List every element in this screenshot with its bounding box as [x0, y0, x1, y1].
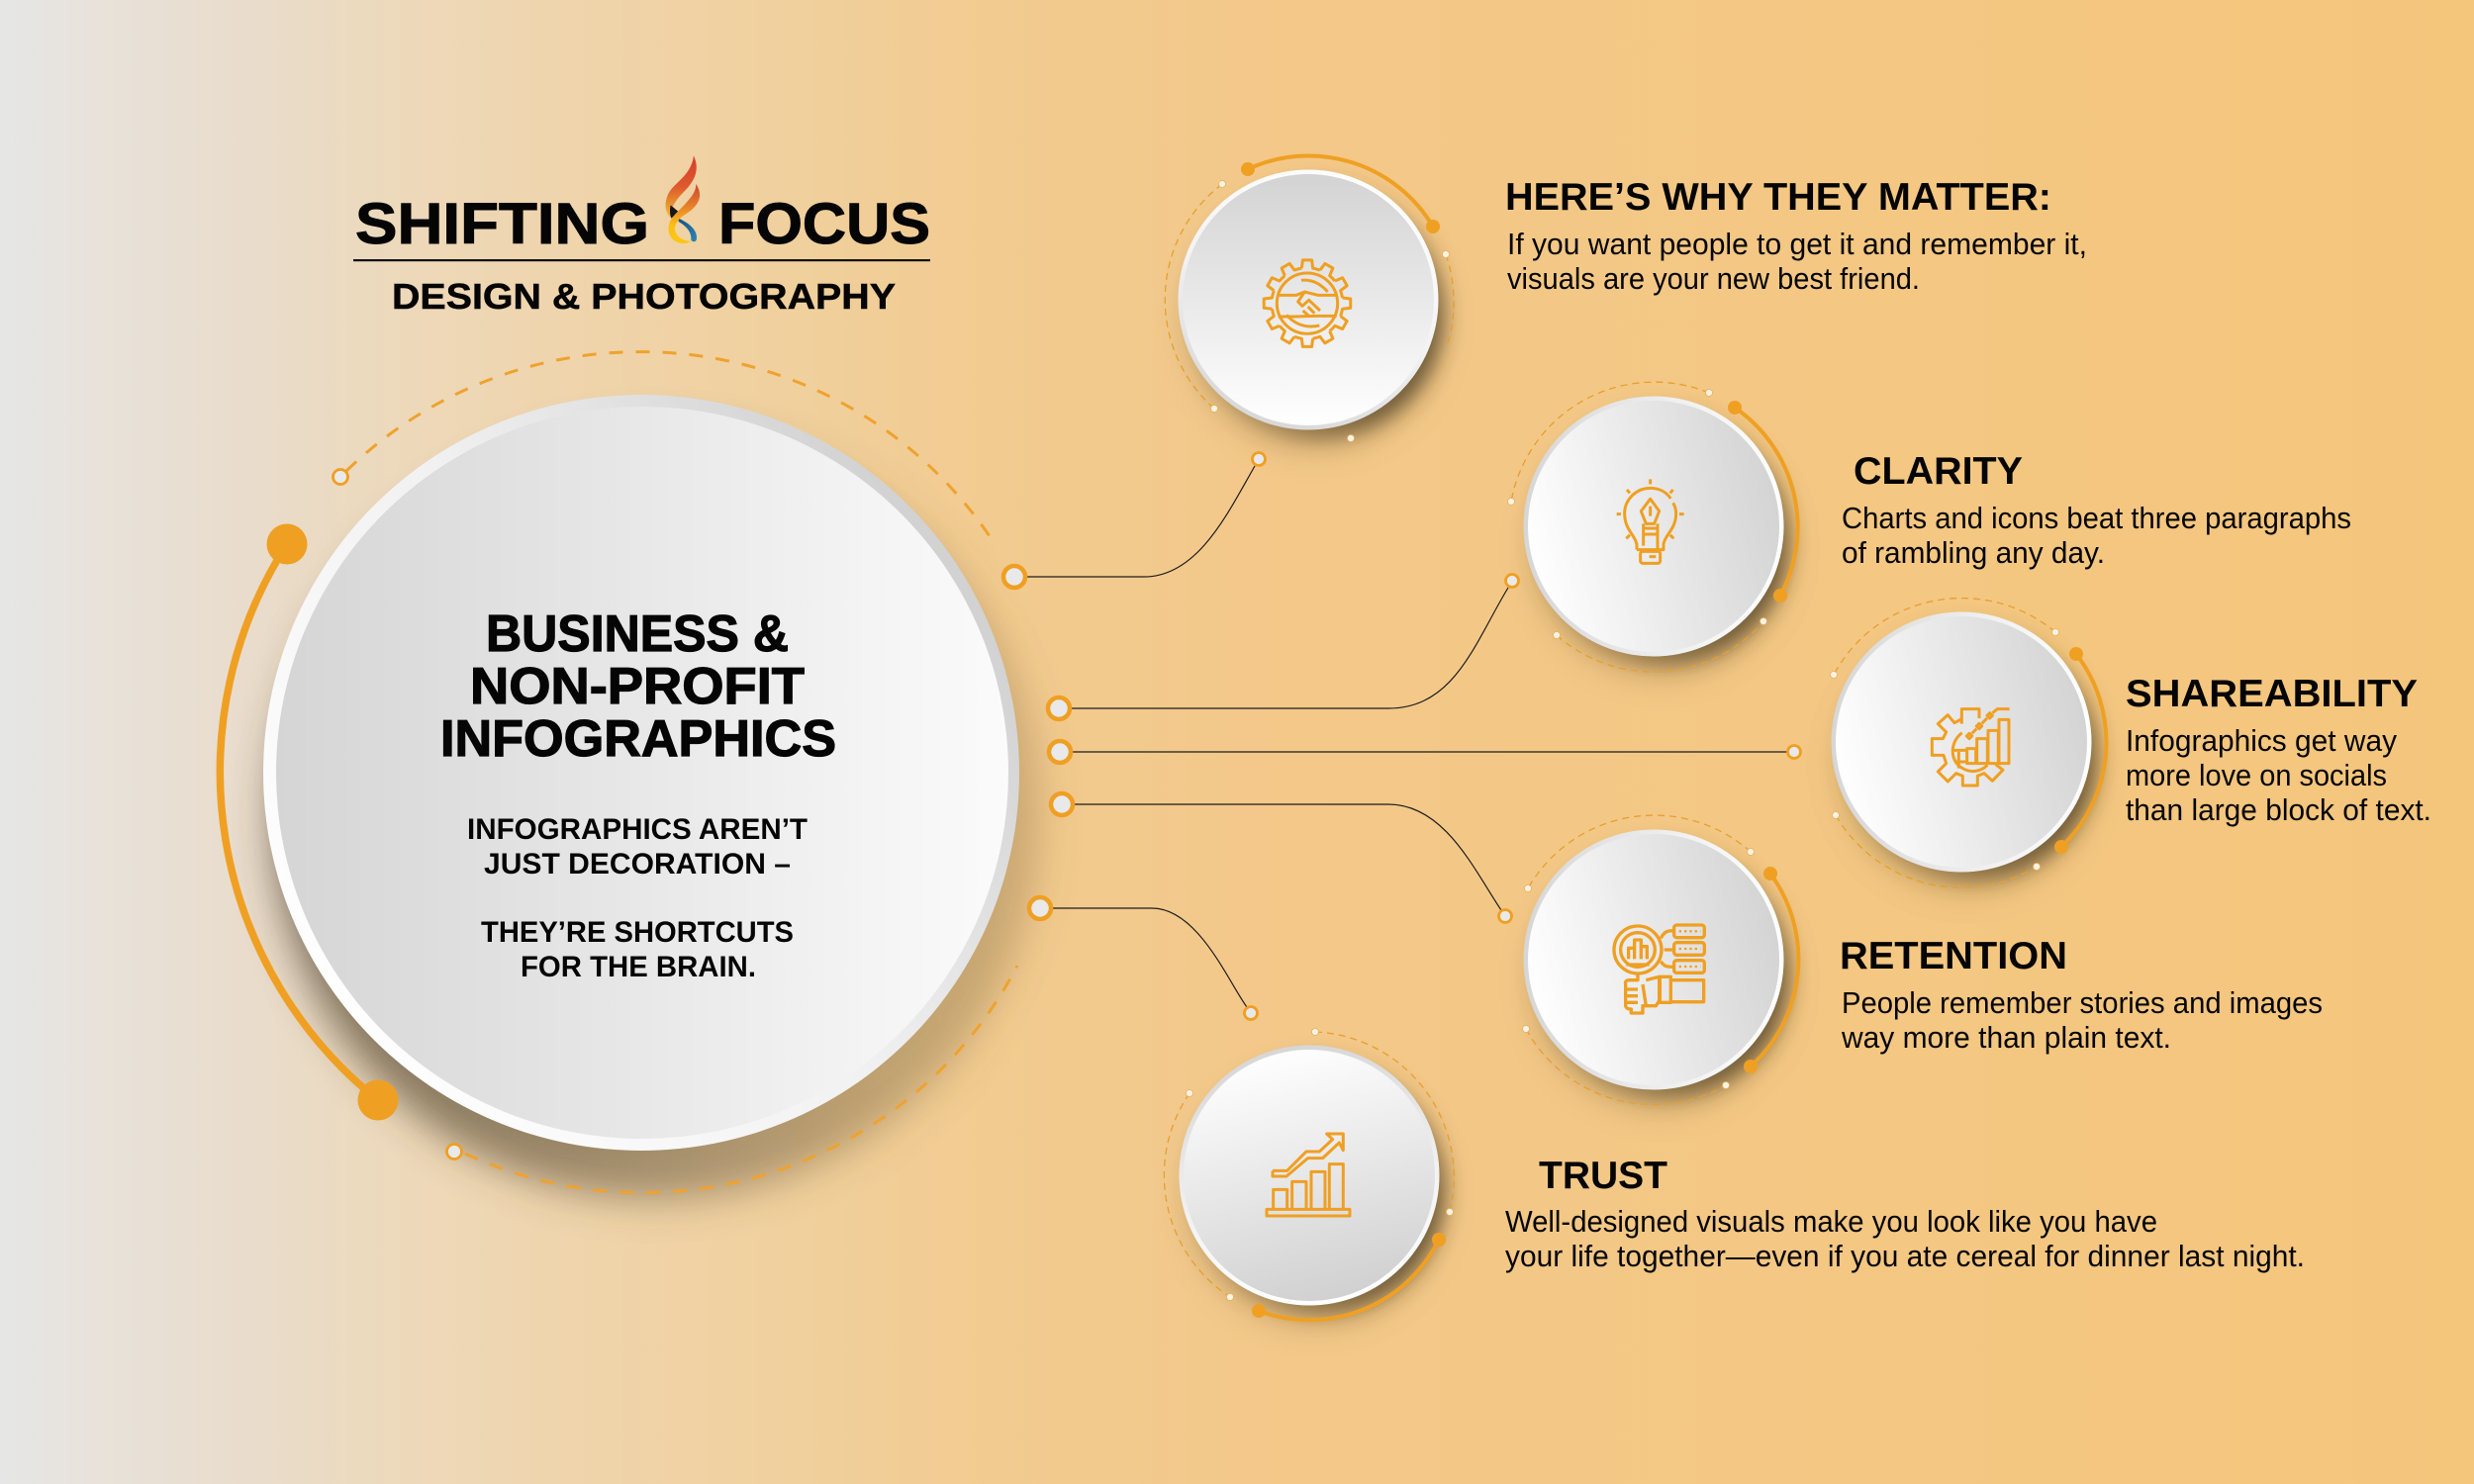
text: shareability: than large block of text. — [2126, 792, 2431, 827]
panel: shareability circle — [1831, 599, 2106, 887]
text: retention: way more than plain text. — [1841, 1020, 2171, 1055]
main heading: INFOGRAPHICS — [440, 710, 836, 768]
logo wordmark — [355, 192, 930, 256]
text: retention: People remember stories and images — [1842, 985, 2323, 1020]
panel: clarity circle — [1508, 382, 1798, 672]
main circle — [263, 395, 1019, 1151]
logo wordmark: FOCUS — [718, 192, 930, 256]
text: retention: RETENTION — [1840, 935, 2067, 977]
main circle shadow — [273, 431, 1041, 1199]
icon: light bulb with pen nib — [1617, 479, 1684, 563]
text: trust: your life together—even if you ate cereal for dinner last night. — [1505, 1239, 2305, 1273]
connector lines — [1003, 453, 1801, 1019]
connector to clarity — [1048, 574, 1518, 719]
main orbit end dots — [333, 469, 461, 1159]
text: shareability — [2126, 673, 2431, 827]
connector to shareability — [1049, 741, 1801, 763]
small circle shadows — [1184, 186, 2098, 1328]
main orange arc — [220, 524, 398, 1120]
main subtext: THEY’RE SHORTCUTS — [481, 916, 794, 949]
icon: gear with growth bars — [1932, 709, 2010, 786]
main heading: BUSINESS & — [486, 605, 789, 663]
main subtext: JUST DECORATION – — [484, 848, 791, 881]
main heading: NON-PROFIT — [470, 658, 805, 715]
text: here's why they matter: If you want people to get it and remember it, — [1507, 227, 2087, 261]
connector to why they matter — [1003, 453, 1265, 588]
connector to trust — [1029, 897, 1257, 1019]
text: clarity: CLARITY — [1854, 450, 2023, 493]
text: trust: Well-designed visuals make you look like you have — [1505, 1204, 2157, 1239]
main heading — [440, 605, 836, 768]
text: shareability: more love on socials — [2126, 758, 2387, 792]
main subtext — [467, 813, 808, 983]
panel: why they matter circle — [1165, 155, 1454, 441]
icon: magnifier with data and hand — [1614, 925, 1704, 1013]
main dashed orbit — [346, 352, 1017, 1193]
text: here's why they matter: HERE’S WHY THEY MATTER: — [1505, 176, 2051, 219]
main subtext: FOR THE BRAIN. — [521, 951, 756, 983]
logo wordmark: SHIFTING — [355, 192, 649, 256]
text: here's why they matter: visuals are your new best friend. — [1507, 261, 1920, 296]
text: clarity — [1842, 450, 2351, 570]
text: shareability: SHAREABILITY — [2126, 673, 2418, 715]
text: trust: TRUST — [1539, 1155, 1667, 1197]
text: retention — [1840, 935, 2323, 1055]
logo: Shifting Focus — [353, 155, 930, 317]
text: clarity: of rambling any day. — [1842, 535, 2105, 570]
icon: gear with handshake — [1264, 259, 1351, 347]
panel: retention circle — [1522, 815, 1798, 1104]
text: clarity: Charts and icons beat three paragraphs — [1842, 501, 2351, 535]
connector to retention — [1051, 793, 1512, 922]
text: shareability: Infographics get way — [2126, 723, 2397, 758]
logo flame icon — [666, 155, 700, 243]
logo tagline: DESIGN & PHOTOGRAPHY — [392, 276, 896, 317]
icon: rising bar chart with arrow — [1267, 1134, 1350, 1216]
text: here's why they matter — [1505, 176, 2087, 296]
panel: trust circle — [1164, 1029, 1454, 1320]
main subtext: INFOGRAPHICS AREN’T — [467, 813, 808, 846]
text: trust — [1505, 1155, 2305, 1273]
